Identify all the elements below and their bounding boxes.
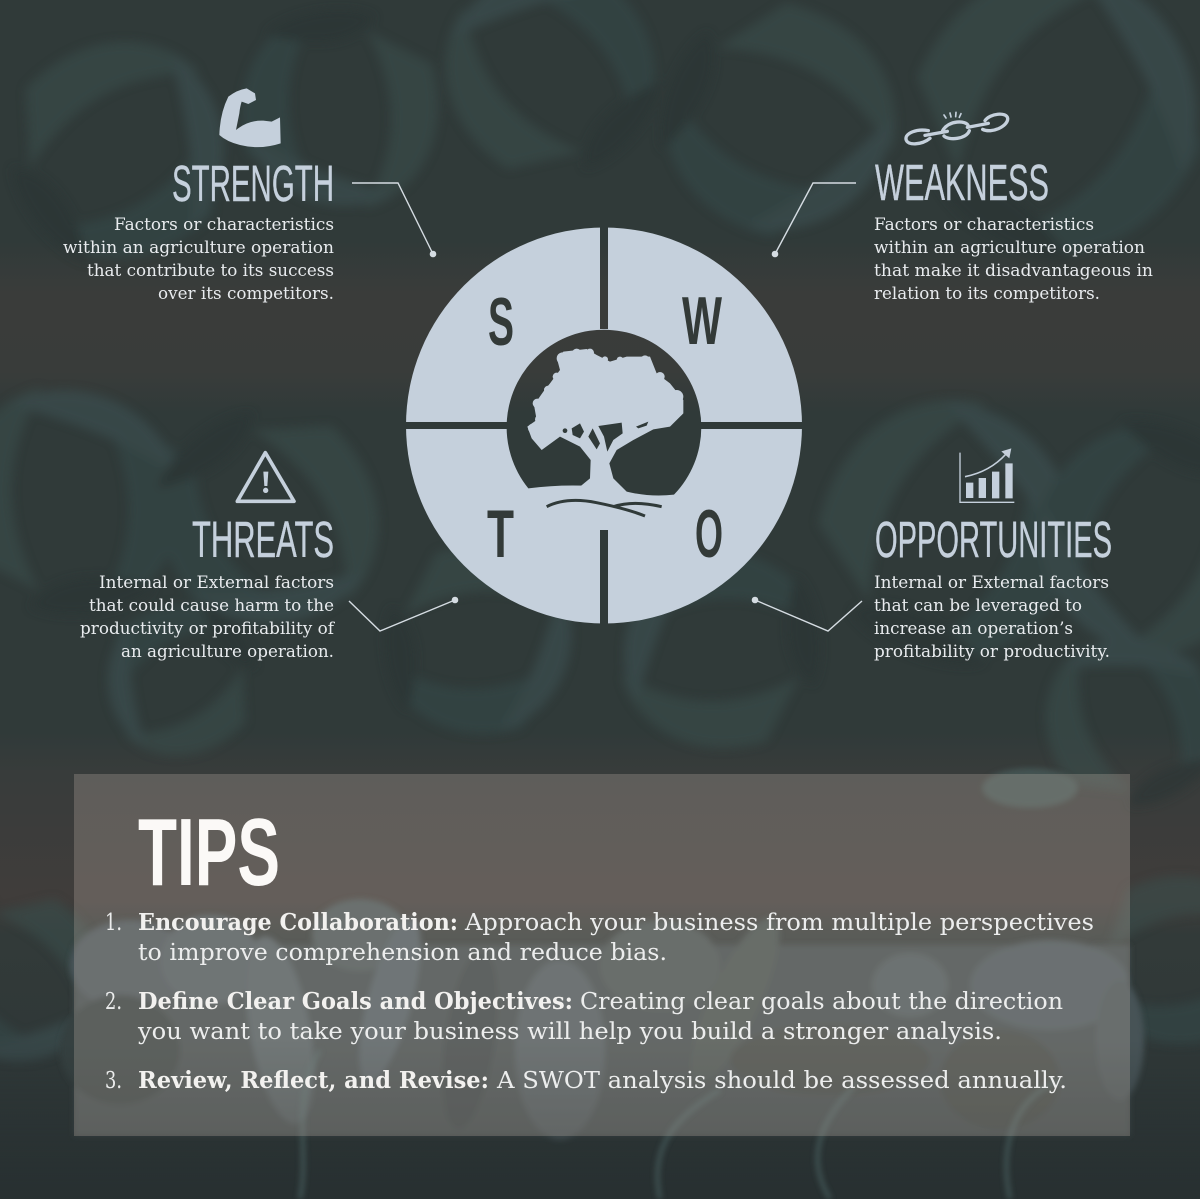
icon: rising bar chart bbox=[960, 448, 1014, 502]
heading: weakness: WEAKNESS bbox=[875, 154, 1049, 211]
text: opportunities description: profitability or productivity. bbox=[874, 642, 1110, 662]
heading: tips: TIPS bbox=[138, 799, 280, 906]
heading: strength: STRENGTH bbox=[172, 155, 334, 212]
panel: threats bbox=[80, 453, 458, 662]
icon: warning triangle bbox=[237, 453, 294, 501]
panel: tips background bbox=[74, 774, 1130, 1136]
connector: strength bbox=[352, 183, 436, 257]
text: threats description bbox=[80, 573, 336, 662]
text: opportunities description: increase an operation’s bbox=[874, 619, 1073, 639]
tip 2: you want to take your business will help you build a stronger analysis. bbox=[137, 1019, 1002, 1045]
text: opportunities description bbox=[874, 573, 1110, 662]
panel: strength bbox=[63, 88, 436, 304]
letter W: W bbox=[682, 283, 723, 359]
text: weakness description: that make it disadvantageous in bbox=[874, 261, 1153, 281]
text: opportunities description: Internal or External factors bbox=[874, 573, 1109, 593]
text: threats description: productivity or profitability of bbox=[80, 619, 336, 639]
tip 3: A SWOT analysis should be assessed annually. bbox=[496, 1068, 1067, 1094]
letter T: T bbox=[487, 496, 514, 572]
icon: flexed arm bbox=[219, 88, 281, 147]
text: threats description: an agriculture operation. bbox=[121, 642, 334, 662]
text: weakness description: within an agriculture operation bbox=[874, 238, 1145, 258]
tip 1: Approach your business from multiple perspectives bbox=[464, 910, 1094, 936]
connector: weakness bbox=[772, 183, 856, 257]
text: strength description: that contribute to its success bbox=[87, 261, 334, 281]
text: weakness description bbox=[874, 215, 1153, 304]
tip 1: Encourage Collaboration: bbox=[138, 909, 458, 936]
text: threats description: that could cause harm to the bbox=[89, 596, 334, 616]
tip 2: Define Clear Goals and Objectives: bbox=[138, 988, 573, 1015]
panel: opportunities bbox=[752, 448, 1112, 662]
tip 1: 1. bbox=[105, 910, 122, 936]
SWOT circle with tree logo bbox=[406, 228, 802, 624]
tip 2 bbox=[105, 988, 1063, 1045]
text: threats description: Internal or External factors bbox=[99, 573, 334, 593]
tip 1 bbox=[105, 909, 1094, 966]
heading: threats: THREATS bbox=[192, 511, 334, 568]
text: strength description: over its competitors. bbox=[158, 284, 334, 304]
tip 1: to improve comprehension and reduce bias. bbox=[138, 940, 667, 966]
text: strength description: within an agriculture operation bbox=[63, 238, 334, 258]
text: weakness description: relation to its competitors. bbox=[874, 284, 1100, 304]
bottom cabbage row bbox=[60, 899, 1144, 1140]
panel: weakness bbox=[772, 112, 1153, 304]
tip 3: 3. bbox=[105, 1068, 122, 1094]
text: strength description: Factors or characteristics bbox=[114, 215, 334, 235]
connector: opportunities bbox=[752, 597, 862, 631]
connector: threats bbox=[349, 597, 458, 631]
tip 2: 2. bbox=[105, 989, 122, 1015]
tip 2: Creating clear goals about the direction bbox=[580, 989, 1063, 1015]
letter O: O bbox=[695, 496, 723, 572]
tip 3: Review, Reflect, and Revise: bbox=[138, 1067, 489, 1094]
icon: broken chain bbox=[906, 112, 1008, 144]
text: opportunities description: that can be leveraged to bbox=[874, 596, 1082, 616]
text: strength description bbox=[63, 215, 334, 304]
tip 3 bbox=[105, 1067, 1067, 1094]
letter S: S bbox=[488, 284, 514, 360]
text: weakness description: Factors or characteristics bbox=[874, 215, 1094, 235]
